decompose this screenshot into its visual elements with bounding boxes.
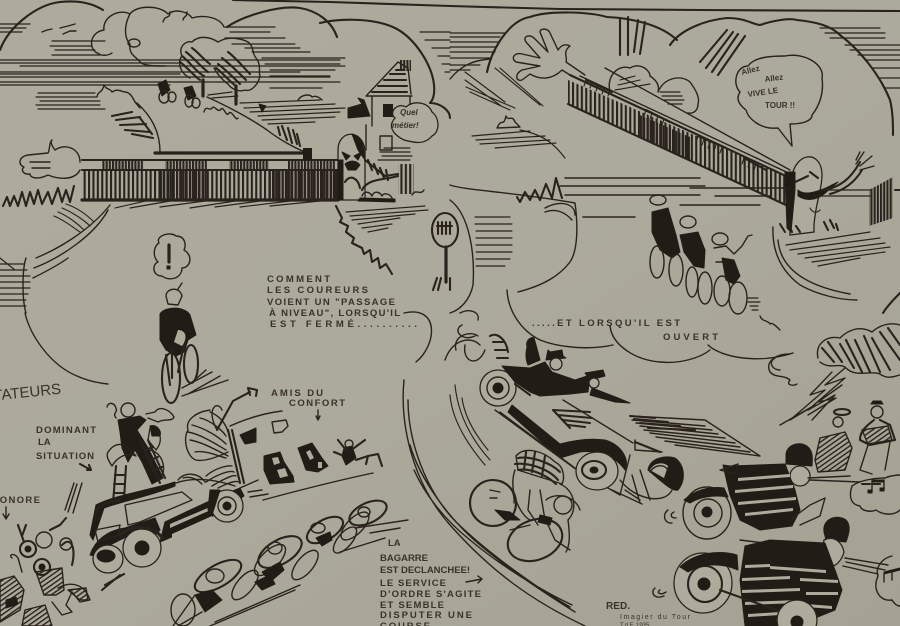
icon: road sign [432, 213, 458, 290]
sound crowd [0, 518, 90, 626]
caption: closed: EST FERMÉ.......... [270, 319, 417, 330]
caption: open: OUVERT [663, 332, 718, 343]
right fence [815, 177, 900, 226]
caption: la bagarre: LA [388, 538, 401, 549]
caption: open: .....ET LORSQU'IL EST [532, 318, 680, 329]
long car [495, 400, 760, 504]
caption: la bagarre [380, 538, 482, 626]
label: amis du confort: CONFORT [289, 398, 345, 409]
top frame line [233, 0, 900, 11]
speech bubble: Allez vive le tour: TOUR !! [765, 101, 795, 110]
panel: gate open [450, 12, 900, 385]
caption: la bagarre: ET SEMBLE [380, 600, 444, 611]
keeper saluting [780, 152, 874, 235]
grass and hatch at right of gate [336, 206, 428, 274]
label: dominant [36, 425, 96, 470]
cyclist waiting [160, 283, 228, 403]
cloud outline of open panel [450, 12, 900, 313]
caption: la bagarre: D'ORDRE S'AGITE [380, 589, 481, 600]
exclamation bubble [154, 234, 190, 279]
speech bubble: Quel metier: Quel [400, 108, 419, 117]
caption: la bagarre: DISPUTER UNE [380, 610, 472, 621]
panel: gate closed [0, 1, 458, 403]
speech bubble: Allez vive le tour [736, 55, 823, 146]
speech bubble: Allez vive le tour: VIVE LE [747, 86, 779, 99]
grass at left [3, 186, 110, 278]
label: sonore [0, 495, 40, 519]
level crossing barrier [82, 148, 338, 200]
speech bubble: Allez vive le tour: Allez [764, 72, 784, 84]
lower lobes of open panel [507, 290, 797, 385]
horizon and sky hatching [0, 24, 450, 88]
hatched exhaust cloud [186, 406, 238, 488]
label: dominant: DOMINANT [36, 425, 96, 436]
comfort spectators [264, 440, 382, 484]
open car [90, 474, 244, 590]
caption: closed: VOIENT UN "PASSAGE [267, 297, 395, 308]
caption: closed: À NIVEAU", LORSQU'IL [269, 308, 400, 319]
large cyclist [470, 450, 580, 568]
caption: closed: COMMENT [267, 274, 330, 285]
hatch above crowd [65, 483, 82, 513]
right hill and field hatching [207, 92, 345, 152]
signature: Imagier du Tour [620, 614, 691, 621]
music bubble one [850, 475, 900, 514]
label: amis du confort [271, 388, 345, 420]
speech bubble: Quel metier [391, 103, 438, 142]
official motorbike with top hat [455, 334, 630, 406]
police motorbike one [665, 444, 860, 548]
standing policemen [815, 401, 895, 484]
bush and hatch at left hill [36, 85, 160, 152]
caption: la bagarre: BAGARRE [380, 553, 428, 564]
three riders [650, 195, 760, 314]
ground lines [248, 473, 373, 500]
signature: RED. [606, 601, 630, 612]
trees [180, 37, 260, 104]
keeper character [338, 134, 398, 202]
speech bubble: Quel metier: métier! [392, 121, 419, 130]
music bubble two [876, 556, 900, 606]
flag and truck [217, 388, 288, 488]
label: dominant: SITUATION [36, 451, 94, 462]
raised barrier [568, 68, 795, 206]
cloud outline of closed panel [0, 1, 450, 384]
panel: spectators and car at left [0, 381, 482, 626]
distant clouds behind barrier [609, 66, 699, 113]
clouds [92, 7, 224, 66]
signature [606, 601, 691, 626]
caption: closed [267, 274, 417, 330]
peloton [171, 495, 408, 626]
ground hatching under barrier [115, 200, 330, 208]
ground hatching [560, 178, 890, 266]
dark storm clouds and lightning [780, 324, 900, 425]
caption: la bagarre: LE SERVICE [380, 578, 446, 589]
label: dominant: LA [38, 437, 51, 448]
small bushes [472, 116, 575, 220]
distant cyclists [158, 80, 238, 119]
road curves [403, 311, 585, 626]
man on ladder [107, 403, 174, 503]
icon: gate hand [20, 140, 80, 178]
label: amis du confort: AMIS DU [271, 388, 323, 399]
left margin hatch [0, 258, 30, 313]
caption: closed: LES COUREURS [267, 285, 368, 296]
police motorbike two [653, 517, 888, 626]
icon: birds [42, 24, 76, 34]
icon: raised hand [513, 29, 790, 178]
sky hatching [450, 17, 900, 266]
house [348, 60, 424, 195]
caption: open [532, 318, 718, 343]
speech bubble: Allez vive le tour: Allez [740, 64, 761, 77]
caption: la bagarre: EST DECLANCHEE! [380, 565, 470, 576]
panel: race at right [403, 311, 900, 626]
